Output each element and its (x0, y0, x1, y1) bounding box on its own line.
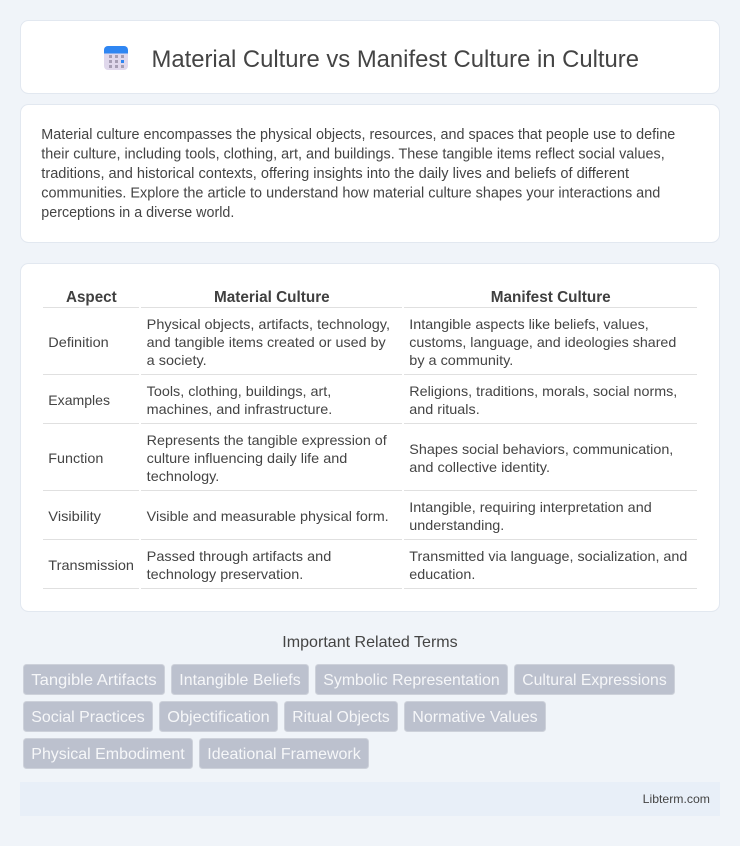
row: definition: a society. (147, 352, 207, 368)
row: visibility (48, 499, 652, 533)
text block: introduction: perceptions in a diverse world. (41, 204, 234, 221)
footer credit: Libterm.com (643, 792, 710, 806)
tag: normative values: Normative Values (412, 709, 538, 726)
row: function: culture influencing daily life and (147, 450, 347, 466)
row: examples (48, 383, 677, 417)
text block: introduction: communities. Explore the article to understand how material culture shapes your interactions and (41, 184, 660, 202)
row: visibility: Intangible, requiring interpretation and (409, 499, 652, 515)
table header row: Manifest Culture (491, 289, 611, 306)
row: definition (48, 316, 676, 368)
tag: physical embodiment: Physical Embodiment (31, 746, 185, 763)
row: transmission: Passed through artifacts and (147, 548, 331, 564)
row: function: Represents the tangible expression of (147, 432, 387, 448)
tag: ideational framework (200, 738, 368, 768)
tag: ritual objects: Ritual Objects (292, 709, 390, 726)
row: transmission: Transmission (48, 557, 134, 573)
row: visibility: Visibility (48, 508, 101, 524)
tag: cultural expressions (514, 664, 674, 694)
tag: objectification (160, 702, 278, 732)
row: definition: Physical objects, artifacts, technology, (147, 316, 390, 332)
tag: intangible beliefs (172, 664, 308, 694)
row: definition: Definition (48, 334, 109, 350)
tag: tangible artifacts: Tangible Artifacts (31, 672, 157, 689)
tag: tangible artifacts (24, 664, 164, 694)
title: Material Culture vs Manifest Culture in Culture (152, 46, 639, 73)
text block: introduction (41, 126, 675, 221)
table header row: Aspect (66, 289, 117, 306)
row: visibility: understanding. (409, 517, 504, 533)
row: examples: Tools, clothing, buildings, art, (147, 383, 331, 399)
table header row: Material Culture (214, 289, 330, 306)
row: definition: by a community. (409, 352, 513, 368)
heading: important related terms: Important Related Terms (282, 634, 458, 651)
row: visibility: Visible and measurable physical form. (147, 508, 389, 524)
tag: symbolic representation (316, 664, 508, 694)
tag: social practices (24, 702, 152, 732)
row: examples: machines, and infrastructure. (147, 401, 332, 417)
header panel (20, 20, 720, 94)
text block: introduction: traditions, and historical contexts, offering insights into the daily lives and beliefs of different (41, 165, 630, 182)
tag: intangible beliefs: Intangible Beliefs (179, 672, 301, 689)
tag: normative values (404, 702, 546, 732)
row: examples: and rituals. (409, 401, 480, 417)
row: definition: customs, language, and ideologies shared (409, 334, 676, 350)
row: definition: and tangible items created or used by (147, 334, 386, 350)
footer (20, 782, 720, 816)
row: transmission (48, 548, 687, 582)
row: transmission: Transmitted via language, socialization, and (409, 548, 687, 564)
text block: introduction: their culture, including tools, clothing, art, and buildings. These tangible items reflect social values, (41, 146, 665, 162)
tag: ideational framework: Ideational Framework (207, 746, 362, 763)
tag: ritual objects (284, 702, 398, 732)
tag: symbolic representation: Symbolic Representation (323, 672, 500, 689)
tag: objectification: Objectification (167, 709, 270, 726)
tag list: related terms (24, 664, 674, 768)
tag: cultural expressions: Cultural Expressions (522, 672, 667, 689)
icon: calendar (104, 46, 128, 70)
tag: social practices: Social Practices (31, 709, 145, 726)
row: function (48, 432, 673, 484)
row: examples: Religions, traditions, morals, social norms, (409, 383, 677, 399)
text block: introduction: Material culture encompasses the physical objects, resources, and spaces that people use to define (41, 126, 675, 143)
table header row (66, 289, 611, 306)
row: function: Shapes social behaviors, communication, (409, 441, 673, 457)
row: transmission: education. (409, 566, 475, 582)
row: function: Function (48, 450, 103, 466)
row: definition: Intangible aspects like beliefs, values, (409, 316, 649, 332)
panel: comparison table (20, 264, 720, 612)
tag: physical embodiment (24, 738, 192, 768)
row: function: and collective identity. (409, 459, 550, 475)
panel: introduction (20, 104, 720, 242)
row: examples: Examples (48, 392, 110, 408)
row: function: technology. (147, 468, 219, 484)
row: transmission: technology preservation. (147, 566, 303, 582)
